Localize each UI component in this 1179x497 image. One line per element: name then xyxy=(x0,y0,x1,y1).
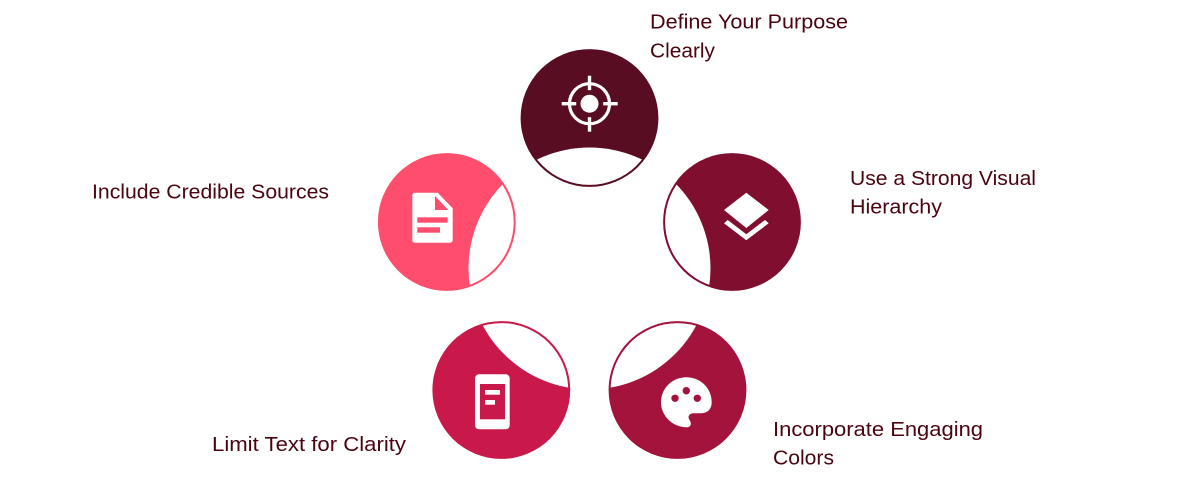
label: include credible sources: Include Credible Sources xyxy=(92,182,329,204)
icon: document xyxy=(412,193,453,243)
icon: phone with text xyxy=(475,374,510,429)
label: use a strong visual hierarchy xyxy=(850,168,1036,218)
label: limit text for clarity: Limit Text for Clarity xyxy=(212,434,406,456)
label: define your purpose xyxy=(650,12,848,62)
circle: engaging colors xyxy=(608,321,746,459)
icon: layers xyxy=(724,193,769,240)
panel: engaging colors xyxy=(608,321,982,464)
panel: limit text xyxy=(214,321,570,459)
label: use a strong visual hierarchy: Hierarchy xyxy=(850,196,942,218)
label: define your purpose: Define Your Purpose xyxy=(650,12,848,34)
panel: define your purpose xyxy=(520,14,848,187)
label: incorporate engaging colors: Incorporate Engaging xyxy=(773,419,983,441)
infographic: five-part circular diagram xyxy=(94,14,1035,464)
circle: limit text xyxy=(432,321,570,459)
icon: target crosshair xyxy=(562,76,618,132)
label: define your purpose: Clearly xyxy=(650,40,715,62)
panel: credible sources xyxy=(94,153,516,291)
circle: credible sources xyxy=(378,153,516,291)
panel: strong visual hierarchy xyxy=(663,153,1035,291)
icon: paint palette xyxy=(661,377,712,427)
label: incorporate engaging colors xyxy=(773,419,983,470)
circle: strong visual hierarchy xyxy=(663,153,801,291)
label: incorporate engaging colors: Colors xyxy=(773,448,834,470)
circle: define your purpose xyxy=(520,49,658,187)
label: use a strong visual hierarchy: Use a Strong Visual xyxy=(850,168,1036,190)
